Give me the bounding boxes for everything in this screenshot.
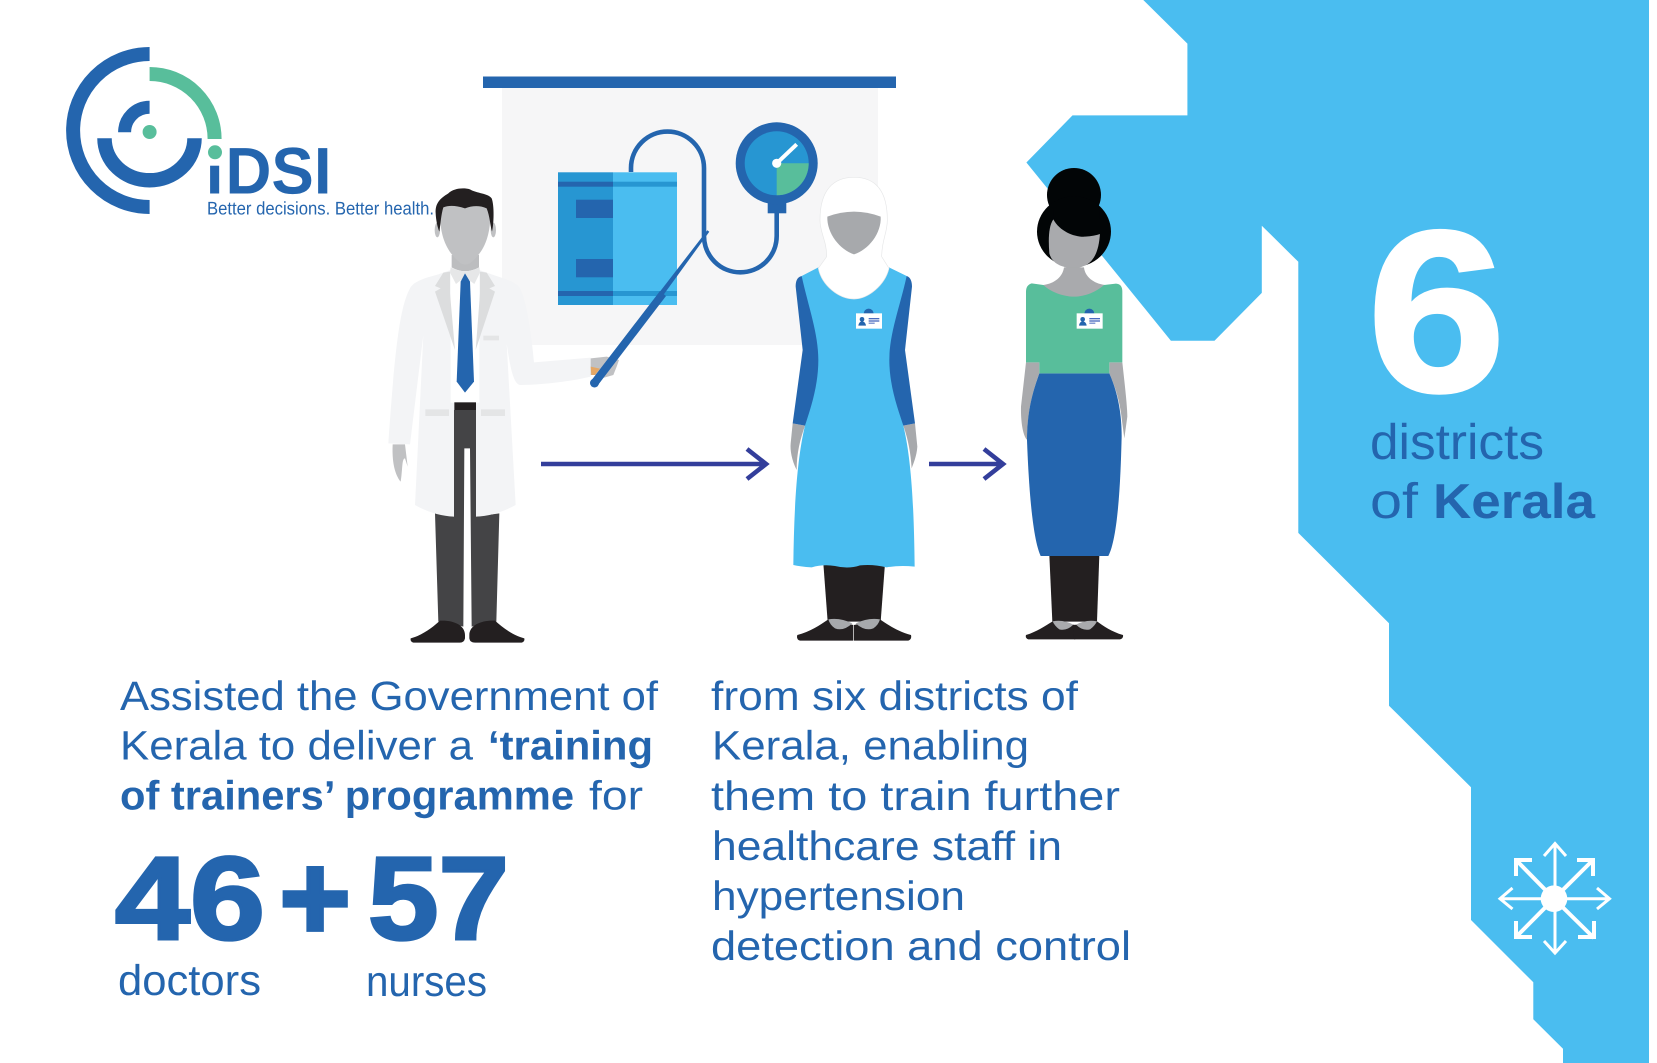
logo: iDSI [73, 54, 434, 218]
logo tagline: Better decisions. Better health. [207, 197, 434, 218]
figure: nurse in headscarf [791, 168, 1127, 641]
text block: programme description: ‘training [488, 722, 653, 768]
nurse headscarf [818, 177, 889, 299]
text block: programme description: Kerala to deliver a [120, 722, 473, 768]
text block: training outcome: from six districts of [711, 673, 1079, 719]
nurse ID badge [856, 309, 882, 329]
second nurse trousers [1049, 555, 1099, 622]
doctor trousers [435, 410, 499, 627]
second nurse neck [1043, 267, 1105, 298]
logo mark: concentric arcs [73, 54, 215, 207]
figure: nurse with hair bun [1021, 168, 1127, 639]
doctor white coat [388, 270, 591, 517]
nurse trousers [823, 563, 885, 622]
text block: programme description [120, 673, 659, 818]
label: districts of Kerala: of [1370, 473, 1418, 529]
pointer stick [590, 230, 709, 388]
second nurse ID badge [1077, 309, 1103, 329]
doctor head [435, 188, 496, 264]
text block: training outcome: Kerala, enabling [712, 722, 1029, 768]
icon: arrows radiating from a centre [1500, 844, 1610, 953]
doctor tie [457, 273, 474, 393]
label: districts of Kerala: districts [1370, 414, 1544, 470]
nurse face [827, 212, 881, 254]
stat: 46 doctors: doctors [118, 957, 261, 1005]
text block: programme description: for [589, 772, 643, 818]
logo wordmark: DSI [226, 134, 332, 208]
doctor collar [450, 267, 480, 284]
doctor pockets [425, 336, 505, 416]
doctor lapels [435, 272, 495, 350]
nurse apron [793, 267, 915, 568]
text block: training outcome: hypertension [712, 873, 965, 919]
doctor left hand [393, 444, 408, 482]
stat: 57 nurses: 57 [368, 833, 509, 965]
stat: 46 doctors [115, 833, 265, 1005]
big number: 6: 6 [1367, 183, 1506, 440]
text block: programme description: Assisted the Government of [120, 673, 659, 719]
text block: training outcome: them to train further [711, 773, 1120, 819]
stat: 46 doctors: 46 [115, 833, 265, 965]
arrow: doctor to nurse [541, 449, 766, 479]
label: districts of Kerala [1370, 414, 1596, 529]
text block: training outcome: detection and control [711, 923, 1131, 969]
doctor shoes [411, 621, 524, 643]
doctor shirt [451, 270, 479, 403]
doctor pointing hand [591, 357, 619, 378]
second nurse arms [1021, 362, 1127, 440]
arrow: nurse to staff [929, 449, 1003, 479]
icon: blood pressure cuff [558, 172, 677, 305]
text block: training outcome [711, 673, 1131, 969]
second nurse fringe [1053, 210, 1100, 237]
icon: pressure gauge [736, 122, 818, 213]
second nurse shoes [1026, 621, 1123, 639]
panel: Kerala map shape [1026, 0, 1649, 1063]
figure: doctor [388, 188, 619, 643]
nurse sleeves [793, 276, 915, 426]
second nurse face [1049, 219, 1100, 268]
second nurse green top [1026, 283, 1122, 373]
doctor belt [454, 402, 476, 410]
plus sign: + [280, 830, 351, 966]
label: districts of Kerala: Kerala [1433, 475, 1596, 529]
nurse arms [791, 423, 917, 470]
panel: presentation board [483, 76, 896, 345]
stat: 57 nurses: nurses [366, 958, 487, 1006]
hair and bun [1037, 168, 1111, 267]
doctor neck [452, 255, 479, 271]
text block: programme description: of trainers’ programme [120, 772, 574, 818]
logo wordmark: i [206, 134, 224, 208]
text block: training outcome: healthcare staff in [712, 823, 1062, 869]
icon: cuff tube [631, 132, 777, 272]
second nurse skirt [1027, 373, 1122, 556]
nurse shoes [797, 619, 911, 641]
